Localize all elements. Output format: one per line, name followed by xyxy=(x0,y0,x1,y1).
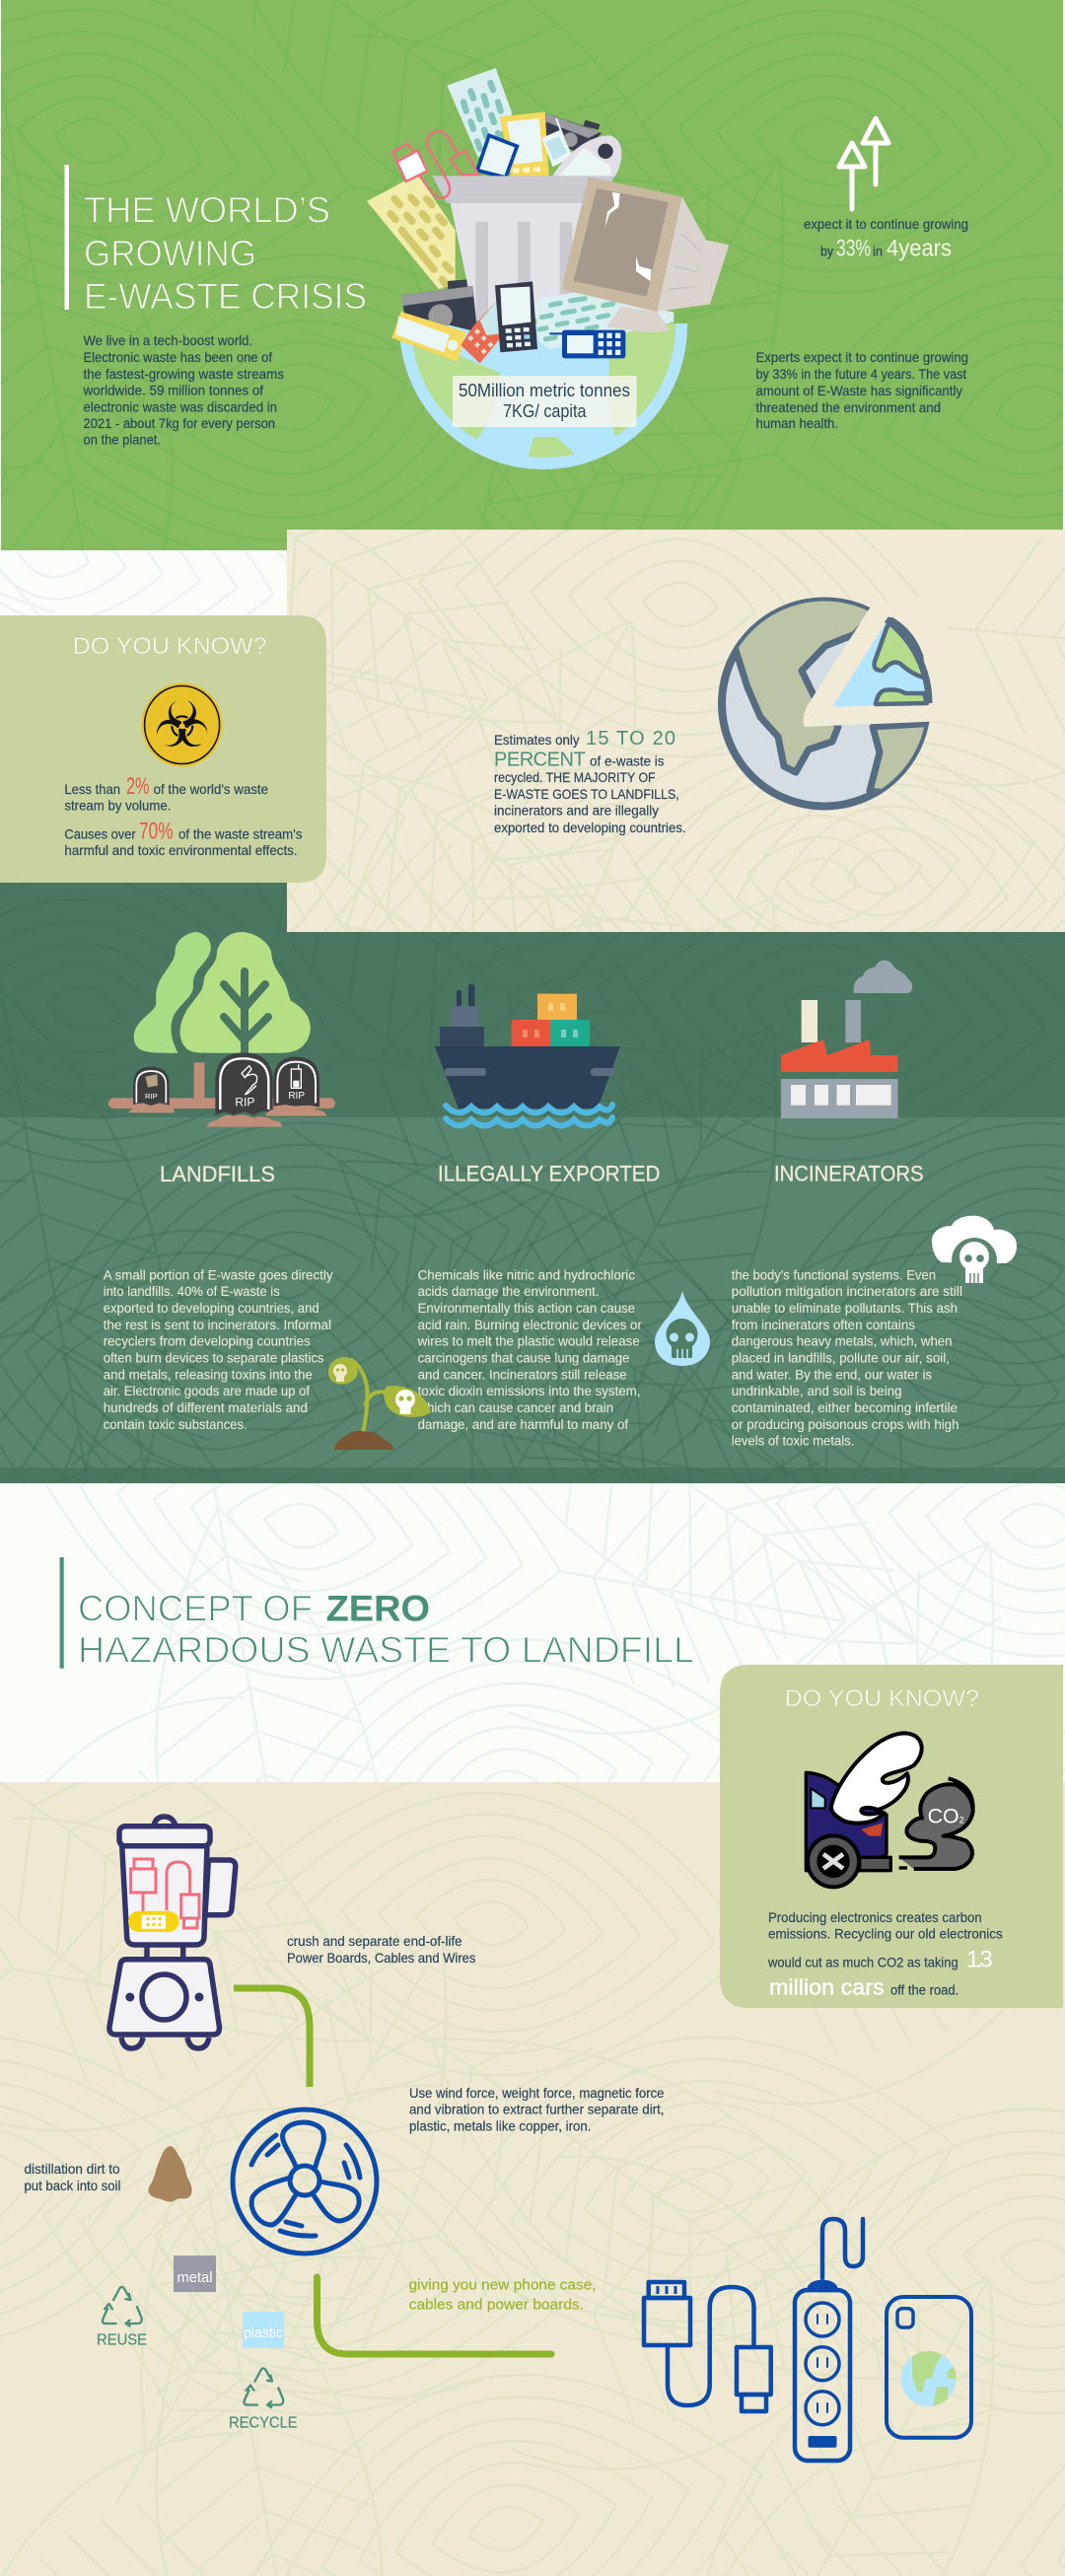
growth paragraph: by 33% in the future 4 years. The vast xyxy=(755,366,966,382)
text block: crush step xyxy=(287,1933,475,1966)
callout: total e-waste amount: 50Million metric tonnes xyxy=(459,381,630,400)
text block: landfills column: contain toxic substances. xyxy=(104,1417,248,1432)
growth paragraph: amount of E-Waste has significantly xyxy=(755,383,962,398)
arrow: blender to fan xyxy=(234,1988,310,2087)
intro paragraph: We live in a tech-boost world. xyxy=(83,332,252,348)
text block: carbon stat: million cars xyxy=(769,1975,885,2000)
text block: distillation xyxy=(24,2161,120,2193)
chart: globe pie showing recycled slice xyxy=(722,582,947,807)
section title: concept of zero hazardous waste: CONCEPT OF xyxy=(78,1588,313,1628)
text block: new products: cables and power boards. xyxy=(409,2298,584,2314)
text block: landfills column: A small portion of E-waste goes directly xyxy=(104,1267,333,1282)
text block: exported column: wires to melt the plastic would release xyxy=(417,1334,640,1349)
icon: yellow tablet xyxy=(500,111,549,176)
stat: volume text: 2% xyxy=(126,773,150,800)
icon: front tree xyxy=(179,932,311,1053)
icon: graves xyxy=(108,1052,335,1127)
section title: concept of zero hazardous waste: HAZARDOUS WASTE TO LANDFILL xyxy=(78,1630,694,1671)
icon: broken monitor xyxy=(561,177,729,332)
text block: exported column: which can cause cancer and brain xyxy=(417,1400,613,1415)
icon: e-waste pile in trash can xyxy=(367,68,729,363)
icon: large skull xyxy=(395,1390,415,1414)
heading: do you know: DO YOU KNOW? xyxy=(785,1685,979,1712)
icon: toxic water drop xyxy=(655,1291,710,1366)
text block: new products xyxy=(409,2278,597,2314)
panel: do you know toxic xyxy=(0,615,326,883)
heading: incinerators: INCINERATORS xyxy=(774,1162,924,1186)
text block: incinerators column: pollution mitigation incinerators are still xyxy=(732,1284,962,1299)
icon: blue cordless phone xyxy=(549,330,625,358)
icon: circuit board xyxy=(128,1911,179,1932)
text block: landfills column: recyclers from developing countries xyxy=(104,1334,311,1349)
intro paragraph: on the planet. xyxy=(83,432,161,448)
callout: total e-waste amount: 7KG/ capita xyxy=(503,401,587,421)
panel: beige process section xyxy=(0,1782,1065,2576)
icon: pink usb cable xyxy=(392,131,478,198)
text block: distillation: distillation dirt to xyxy=(24,2161,120,2177)
icon: toxic plant xyxy=(328,1357,431,1450)
stat: volume text: Less than xyxy=(64,781,120,797)
icon: reuse recycling symbol xyxy=(103,2287,142,2326)
icon: grey camera behind xyxy=(545,113,602,155)
text block: separation step: Use wind force, weight force, magnetic force xyxy=(409,2085,665,2101)
text block: carbon stat: emissions. Recycling our old electronics xyxy=(768,1926,1003,1942)
label: reuse: REUSE xyxy=(97,2332,147,2349)
text block: distillation: put back into soil xyxy=(24,2178,120,2193)
heading: illegally exported: ILLEGALLY EXPORTED xyxy=(438,1162,660,1186)
label: recycle: RECYCLE xyxy=(229,2415,298,2432)
heading: landfills: LANDFILLS xyxy=(160,1162,275,1186)
icon: yellow keyboard xyxy=(367,175,456,289)
stat: expected growth xyxy=(804,216,968,262)
panel: beige recycling rate section xyxy=(287,530,1065,932)
stat: expected growth: 4years xyxy=(887,236,952,262)
text block: incinerators column: dangerous heavy metals, which, when xyxy=(732,1334,953,1349)
text block: exported column: Environmentally this action can cause xyxy=(418,1301,635,1316)
text block: separation step: plastic, metals like copper, iron. xyxy=(409,2118,592,2134)
section title: concept of zero hazardous waste xyxy=(78,1588,694,1671)
stat: volume text: stream by volume. xyxy=(64,798,171,814)
icon: car with CO2 exhaust: CO2 xyxy=(928,1804,964,1827)
icon: yellow radio xyxy=(391,312,466,362)
stat: volume text: of the world's waste xyxy=(154,781,268,797)
icon: small skull xyxy=(333,1364,347,1382)
text block: recycling percentage: Estimates only xyxy=(494,732,580,748)
icon: trash can xyxy=(432,176,614,321)
icon: growth arrows xyxy=(839,118,888,209)
text block: recycling percentage: PERCENT xyxy=(494,750,586,771)
icon: graves: RIP xyxy=(288,1091,305,1102)
text block: incinerators column: from incinerators often contains xyxy=(732,1318,915,1332)
icon: mouse blob xyxy=(552,135,621,177)
icon: cargo ship xyxy=(435,984,620,1126)
stat: volume text: harmful and toxic environmental effects. xyxy=(64,842,298,858)
text block: landfills column: air. Electronic goods are made up of xyxy=(104,1384,310,1398)
panel: hero green background xyxy=(1,0,1063,550)
text block: crush step: crush and separate end-of-life xyxy=(287,1933,462,1949)
icon: red flip phone xyxy=(461,300,501,363)
intro paragraph: electronic waste was discarded in xyxy=(83,398,277,414)
icon: cables inside blender xyxy=(131,1859,199,1928)
label: plastic: plastic xyxy=(244,2325,283,2341)
text block: landfills column: exported to developing countries, and xyxy=(104,1301,320,1316)
icon: recycle symbol xyxy=(244,2369,283,2408)
icon: blender crushing e-waste xyxy=(109,1817,236,2048)
intro paragraph: 2021 - about 7kg for every person xyxy=(83,415,275,431)
text block: landfills column: and metals, releasing toxins into the xyxy=(104,1367,313,1382)
icon: fan xyxy=(233,2110,377,2254)
text block: carbon stat: off the road. xyxy=(890,1982,958,1998)
stat: expected growth: by xyxy=(820,244,833,259)
text block: crush step: Power Boards, Cables and Wires xyxy=(287,1950,475,1966)
text block: landfills column: hundreds of different materials and xyxy=(104,1400,308,1415)
icon: teal keypad sheet xyxy=(447,68,512,158)
text block: carbon stat xyxy=(767,1909,1003,2000)
text block: incinerators column: levels of toxic metals. xyxy=(732,1434,854,1449)
text block: incinerators column: placed in landfills, pollute our air, soil, xyxy=(732,1351,950,1365)
text block: exported column: and cancer. Incinerators still release xyxy=(418,1367,627,1382)
growth paragraph: Experts expect it to continue growing xyxy=(755,349,968,365)
text block: carbon stat: 1.3 xyxy=(966,1946,993,1972)
panel: white zero waste header section xyxy=(0,1483,1065,1782)
icon: pale phone xyxy=(541,118,573,167)
section title accent bar xyxy=(60,1557,64,1669)
panel: do you know carbon xyxy=(720,1665,1063,2008)
text block: recycling percentage xyxy=(494,728,686,835)
growth paragraph: human health. xyxy=(755,415,838,431)
text block: incinerators column: or producing poisonous crops with high xyxy=(732,1417,958,1432)
icon: globe under pile xyxy=(400,323,687,469)
text block: carbon stat: would cut as much CO2 as taking xyxy=(767,1954,958,1969)
text block: incinerators column: undrinkable, and soil is being xyxy=(732,1384,902,1398)
text block: incinerators column xyxy=(732,1267,962,1449)
intro paragraph: Electronic waste has been one of xyxy=(83,349,272,365)
text block: incinerators column: unable to eliminate pollutants. This ash xyxy=(732,1301,958,1316)
stat: volume text: 70% xyxy=(139,819,174,845)
callout: total e-waste amount xyxy=(453,376,637,427)
title: THE WORLD’S xyxy=(84,189,330,231)
icon: dirt pile xyxy=(148,2146,192,2202)
icon: toxic cloud xyxy=(932,1216,1017,1283)
text block: landfills column: into landfills. 40% of E-waste is xyxy=(104,1284,280,1299)
text block: incinerators column: and water. By the end, our water is xyxy=(732,1367,932,1382)
icon: black phone xyxy=(495,281,537,352)
text block: exported column: damage, and are harmful to many of xyxy=(418,1417,628,1432)
icon: power strip xyxy=(795,2219,863,2461)
section title: concept of zero hazardous waste: ZERO xyxy=(326,1588,430,1628)
stat: expected growth: 33% xyxy=(836,236,871,262)
text block: exported column: acid rain. Burning electronic devices or xyxy=(418,1318,642,1332)
icon: dark camera xyxy=(401,279,477,332)
growth paragraph xyxy=(755,349,968,431)
heading: do you know: DO YOU KNOW? xyxy=(73,633,267,660)
text block: carbon stat: Producing electronics creates carbon xyxy=(768,1909,982,1925)
text block: exported column: acids damage the environment. xyxy=(418,1284,599,1299)
icon: back tree xyxy=(134,932,211,1053)
icon: teal keyboard xyxy=(534,292,674,349)
intro paragraph: worldwide. 59 million tonnes of xyxy=(83,383,263,398)
panel: white background strip on left xyxy=(0,550,287,615)
text block: exported column: toxic dioxin emissions into the system, xyxy=(418,1384,641,1398)
text block: incinerators column: contaminated, either becoming infertile xyxy=(732,1400,958,1415)
stat: volume text: Causes over xyxy=(64,826,136,842)
text block: exported column: Chemicals like nitric and hydrochloric xyxy=(418,1267,635,1282)
text block: separation step: and vibration to extract further separate dirt, xyxy=(409,2102,665,2117)
growth paragraph: threatened the environment and xyxy=(755,399,941,415)
icon: graves: RIP xyxy=(235,1095,254,1109)
title accent bar xyxy=(65,165,69,310)
text block: recycling percentage: incinerators and are illegally xyxy=(494,803,659,819)
icon: new phone case with globe xyxy=(887,2297,971,2438)
text block: recycling percentage: recycled. THE MAJORITY OF xyxy=(494,769,656,785)
text block: exported column xyxy=(417,1267,642,1432)
title: E-WASTE CRISIS xyxy=(84,276,367,317)
icon: biohazard xyxy=(142,682,223,767)
intro paragraph xyxy=(83,332,284,448)
stat: volume text: of the waste stream's xyxy=(178,826,302,842)
text block: recycling percentage: exported to developing countries. xyxy=(494,820,686,835)
stat: expected growth: in xyxy=(873,244,883,259)
arrow: fan to new products xyxy=(318,2277,551,2354)
stat: volume text xyxy=(64,773,303,858)
icon: blue phone behind lid xyxy=(477,135,517,178)
title: GROWING xyxy=(84,233,256,274)
text block: new products: giving you new phone case, xyxy=(409,2278,597,2294)
icon: car with CO2 exhaust xyxy=(806,1733,973,1887)
text block: recycling percentage: 15 TO 20 xyxy=(586,728,675,750)
stat: expected growth: expect it to continue growing xyxy=(804,216,968,232)
text block: exported column: carcinogens that cause lung damage xyxy=(418,1351,629,1365)
icon: trees and graves for landfills xyxy=(108,932,335,1127)
title xyxy=(84,189,367,317)
label: plastic xyxy=(243,2312,284,2348)
text block: landfills column: often burn devices to separate plastics xyxy=(104,1351,324,1365)
text block: landfills column: the rest is sent to incinerators. Informal xyxy=(104,1318,331,1332)
chart: pulled out pie slice xyxy=(832,619,929,707)
panel: dark green causes section xyxy=(0,883,1065,1483)
intro paragraph: the fastest-growing waste streams xyxy=(83,366,284,382)
text block: recycling percentage: of e-waste is xyxy=(590,753,665,769)
icon: biohazard: ☣ xyxy=(154,689,210,762)
icon: new cable xyxy=(644,2282,771,2411)
icon: graves: RIP xyxy=(145,1092,158,1101)
text block: separation step xyxy=(409,2085,665,2134)
label: metal: metal xyxy=(178,2269,213,2286)
icon: incinerator factory xyxy=(781,961,912,1118)
text block: recycling percentage: E-WASTE GOES TO LANDFILLS, xyxy=(494,786,679,802)
label: metal xyxy=(174,2255,216,2292)
text block: landfills column xyxy=(104,1267,333,1432)
text block: incinerators column: the body's functional systems. Even xyxy=(732,1267,936,1282)
